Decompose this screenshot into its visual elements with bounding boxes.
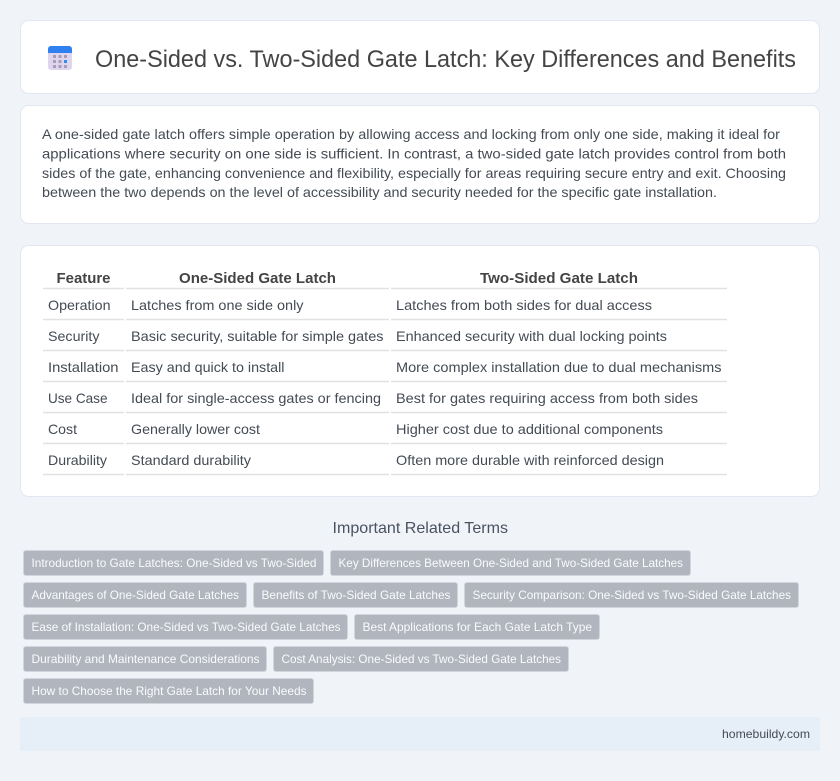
panel: introduction text: A one-sided gate latch offers simple operation by allowing access and locking from only one side, making it ideal for bbox=[42, 126, 780, 142]
table header row bbox=[56, 270, 638, 287]
row: use case bbox=[48, 390, 698, 406]
row: durability: Durability bbox=[48, 452, 107, 468]
tag: Cost Analysis: One-Sided vs Two-Sided Gate Latches bbox=[282, 652, 561, 666]
row: cost bbox=[48, 421, 663, 437]
row: security: Enhanced security with dual locking points bbox=[396, 328, 667, 344]
row: operation: Latches from one side only bbox=[131, 297, 304, 313]
tag: Introduction to Gate Latches: One-Sided vs Two-Sided bbox=[32, 556, 316, 570]
tag bbox=[24, 614, 348, 640]
panel: introduction text: applications where security on one side is sufficient. In contrast, a two-sided gate latch provides control from both bbox=[42, 146, 786, 162]
panel: introduction text: sides of the gate, enhancing convenience and flexibility, especially for areas requiring secure entry and exit. Choosing bbox=[42, 165, 786, 181]
tag: Best Applications for Each Gate Latch Type bbox=[362, 620, 592, 634]
footer: homebuildy.com bbox=[722, 727, 810, 741]
panel: header bbox=[20, 20, 820, 94]
title: One-Sided vs. Two-Sided Gate Latch: Key Differences and Benefits bbox=[95, 46, 796, 73]
panel: introduction text bbox=[20, 106, 820, 224]
row: operation: Operation bbox=[48, 297, 110, 313]
row: cost: Higher cost due to additional components bbox=[396, 421, 663, 437]
tag bbox=[354, 614, 600, 640]
row: durability bbox=[48, 452, 664, 468]
row: security: Basic security, suitable for simple gates bbox=[131, 328, 384, 344]
row: operation: Latches from both sides for dual access bbox=[396, 297, 652, 313]
tag: Durability and Maintenance Considerations bbox=[32, 652, 260, 666]
tag: Security Comparison: One-Sided vs Two-Sided Gate Latches bbox=[472, 588, 791, 602]
tag bbox=[274, 646, 568, 672]
table header row: Feature bbox=[56, 270, 110, 287]
row: use case: Use Case bbox=[48, 390, 108, 406]
row: installation: Easy and quick to install bbox=[131, 359, 284, 375]
panel: comparison table bbox=[20, 246, 820, 496]
tag bbox=[24, 646, 266, 672]
tag: Benefits of Two-Sided Gate Latches bbox=[262, 588, 450, 602]
tag: How to Choose the Right Gate Latch for Your Needs bbox=[32, 684, 306, 698]
row: durability: Often more durable with reinforced design bbox=[396, 452, 664, 468]
footer bbox=[20, 717, 820, 751]
tag bbox=[24, 678, 314, 704]
row: installation bbox=[48, 359, 722, 375]
tag bbox=[330, 550, 690, 576]
tag bbox=[464, 582, 798, 608]
heading: important related terms: Important Related Terms bbox=[332, 520, 508, 537]
tag bbox=[24, 582, 246, 608]
panel: introduction text: between the two depends on the level of accessibility and security needed for the specific gate installation. bbox=[42, 184, 717, 200]
row: operation bbox=[48, 297, 652, 313]
tag bbox=[254, 582, 458, 608]
tag: Key Differences Between One-Sided and Two-Sided Gate Latches bbox=[338, 556, 683, 570]
row: cost: Cost bbox=[48, 421, 77, 437]
row: installation: More complex installation due to dual mechanisms bbox=[396, 359, 722, 375]
icon: calendar bbox=[48, 46, 72, 70]
row: use case: Ideal for single-access gates or fencing bbox=[131, 390, 381, 406]
related term tags bbox=[24, 550, 798, 704]
tag: Ease of Installation: One-Sided vs Two-Sided Gate Latches bbox=[32, 620, 340, 634]
row: use case: Best for gates requiring access from both sides bbox=[396, 390, 698, 406]
tag: Advantages of One-Sided Gate Latches bbox=[32, 588, 239, 602]
row: cost: Generally lower cost bbox=[131, 421, 260, 437]
table header row: One-Sided Gate Latch bbox=[179, 270, 336, 287]
table header row: Two-Sided Gate Latch bbox=[480, 270, 638, 287]
row: durability: Standard durability bbox=[131, 452, 251, 468]
tag bbox=[24, 550, 324, 576]
row: security bbox=[48, 328, 667, 344]
row: installation: Installation bbox=[48, 359, 118, 375]
row: security: Security bbox=[48, 328, 100, 344]
